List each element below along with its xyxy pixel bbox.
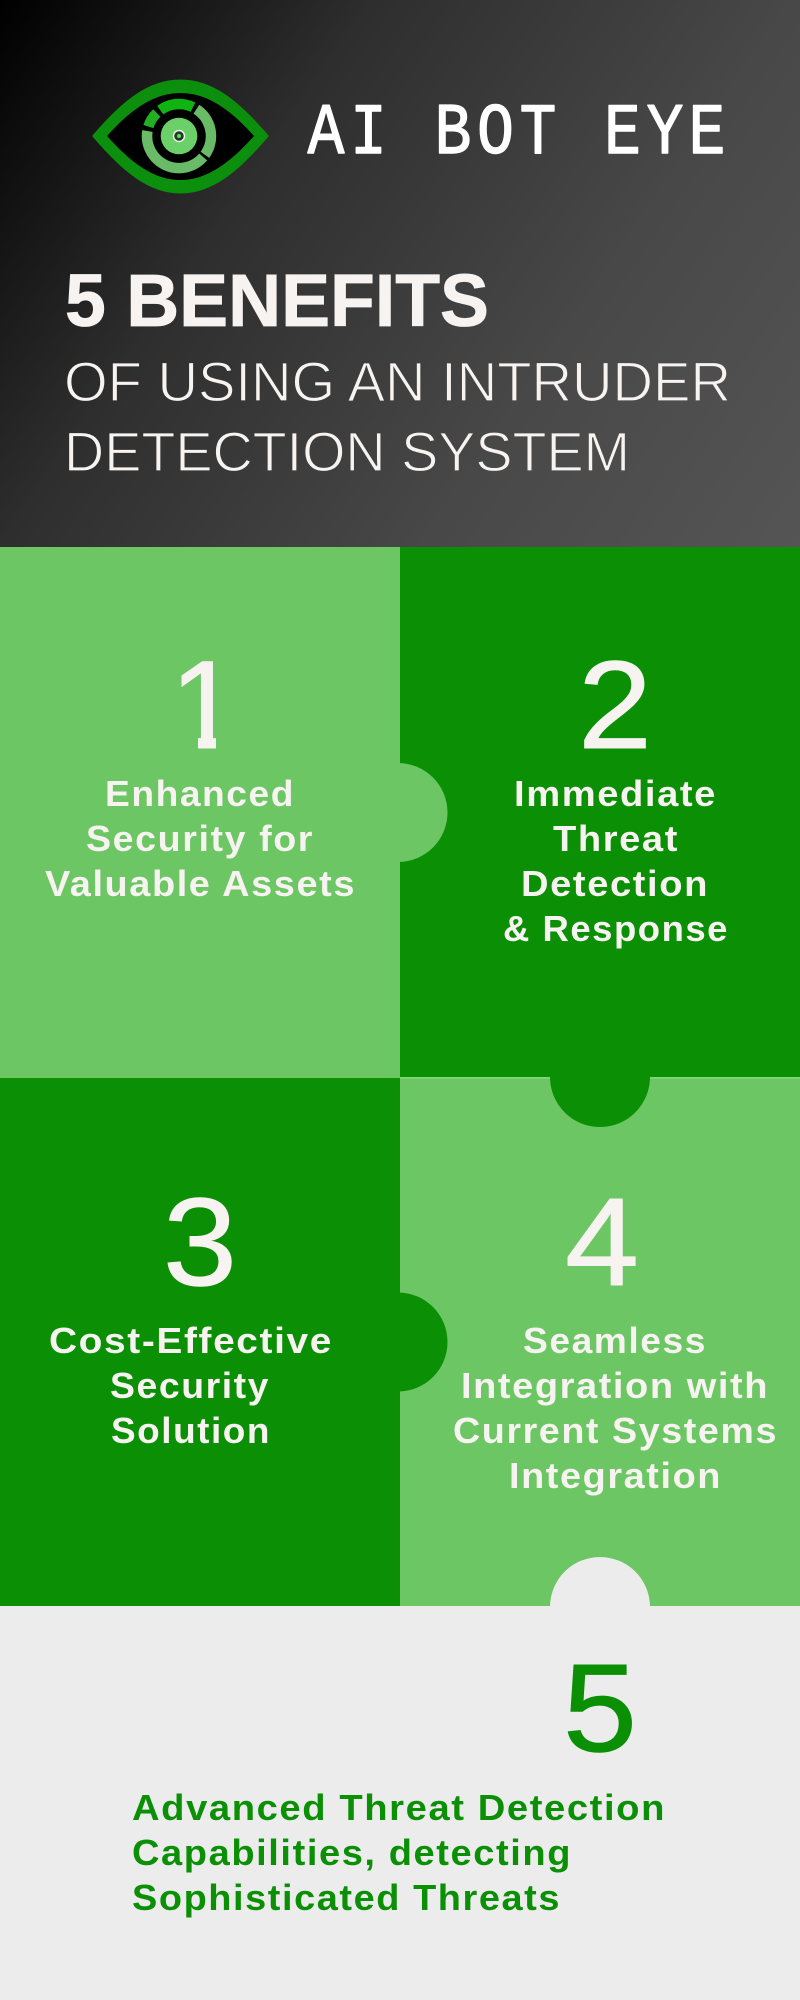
text: seamless integration: Integration (509, 1455, 722, 1496)
text: seamless integration: Current Systems (453, 1410, 778, 1451)
panel: benefit 3 (0, 1078, 448, 1607)
text: immediate threat detection: Detection (521, 863, 709, 904)
panel: benefit 1 (0, 547, 448, 1078)
icon: green eye logo (94, 81, 267, 192)
text: immediate threat detection (503, 773, 729, 949)
panel: benefit 2 (400, 547, 800, 1078)
panel: benefit 4 (400, 1027, 800, 1607)
title: 5 BENEFITS (65, 259, 489, 342)
brand name: AI BOT EYE (308, 94, 725, 176)
text: seamless integration (453, 1320, 778, 1496)
number 5: 5 (563, 1639, 637, 1778)
text: enhanced security: Security for (86, 818, 314, 859)
title: DETECTION SYSTEM (64, 420, 630, 483)
number 2: 2 (578, 636, 652, 775)
text: advanced threat detection: Capabilities, detecting (132, 1832, 572, 1873)
text: immediate threat detection: Threat (553, 818, 679, 859)
header panel (0, 0, 800, 547)
title (64, 259, 731, 483)
text: cost-effective: Cost-Effective (49, 1320, 333, 1361)
text: immediate threat detection: Immediate (514, 773, 717, 814)
text: enhanced security (45, 773, 356, 904)
text: enhanced security: Enhanced (105, 773, 295, 814)
number 3: 3 (163, 1173, 237, 1312)
number 1: 1 (170, 636, 240, 775)
text: enhanced security: Valuable Assets (45, 863, 356, 904)
text: cost-effective: Security (110, 1365, 270, 1406)
text: cost-effective: Solution (111, 1410, 271, 1451)
text: advanced threat detection (132, 1787, 666, 1918)
text: seamless integration: Seamless (523, 1320, 707, 1361)
number 4: 4 (565, 1173, 639, 1312)
text: advanced threat detection: Advanced Threat Detection (132, 1787, 666, 1828)
text: seamless integration: Integration with (461, 1365, 769, 1406)
text: immediate threat detection: & Response (503, 908, 729, 949)
text: advanced threat detection: Sophisticated Threats (132, 1877, 561, 1918)
panel: benefit 5 (0, 1557, 800, 2000)
title: OF USING AN INTRUDER (64, 350, 731, 413)
text: cost-effective (49, 1320, 333, 1451)
